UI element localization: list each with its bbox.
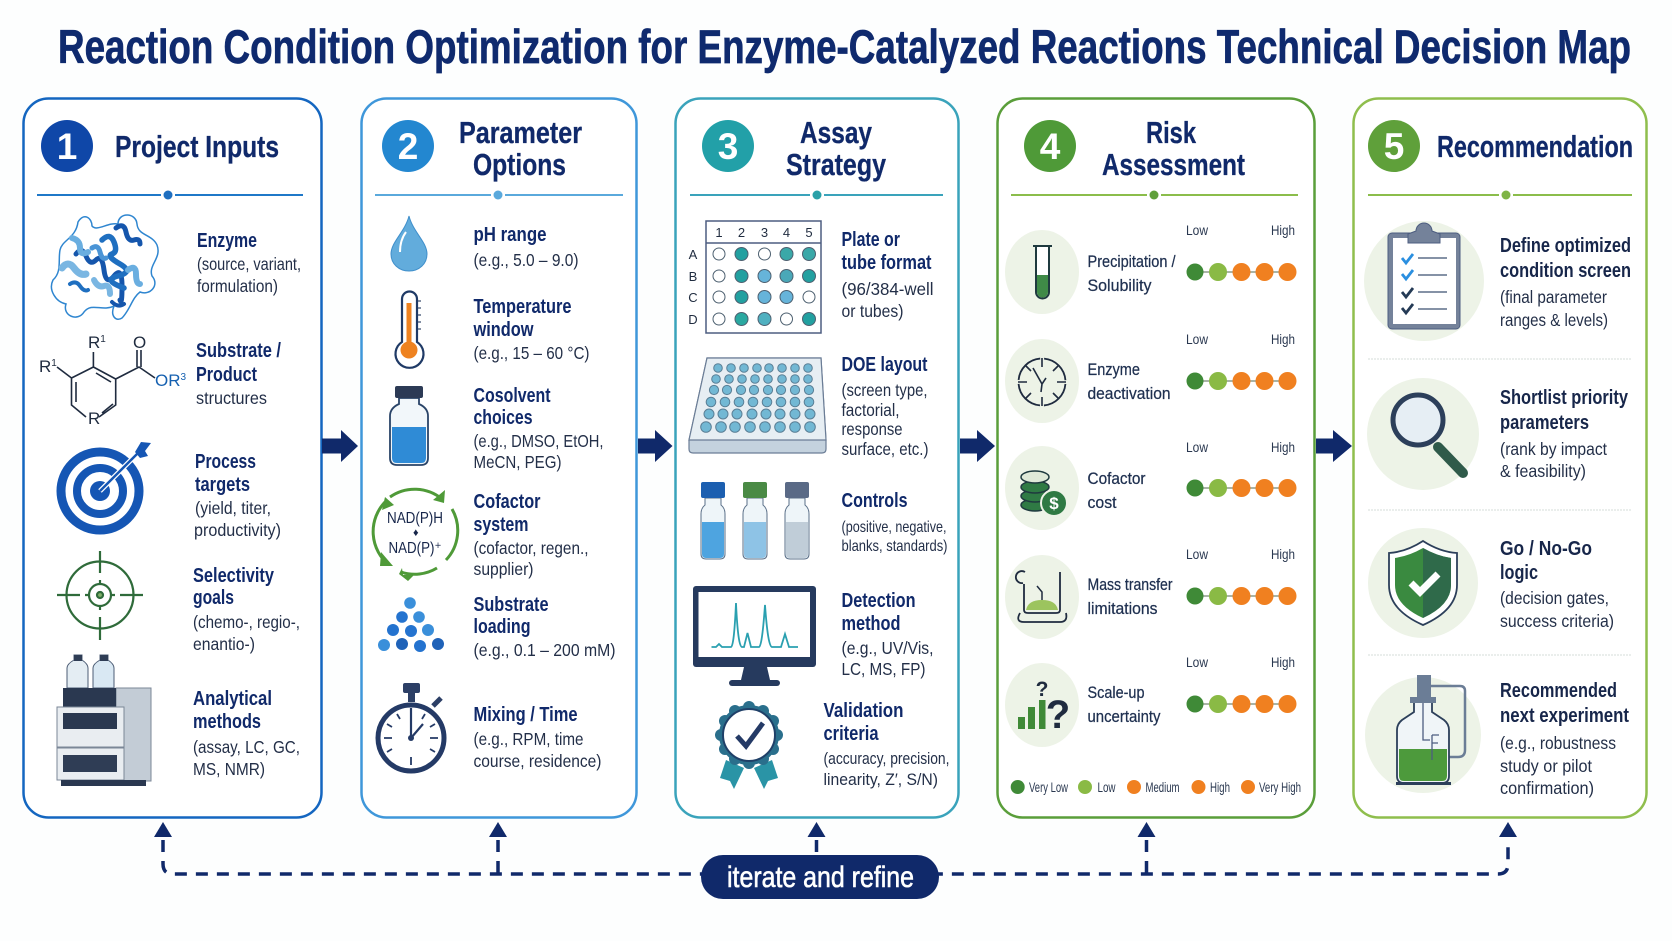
legend: risk scale: Very Low [1029,780,1068,795]
risk row: cofactor cost [1005,440,1296,530]
icon: cofactor cycle: ♦ [413,527,419,539]
icon: well plate grid: C [688,290,698,305]
text: cosolvent choices: Cosolvent [474,385,551,407]
text: process targets: Process [195,451,256,473]
text: cosolvent choices: choices [474,407,532,429]
icon: well plate grid: 4 [783,225,790,240]
text: validation criteria: linearity, Z′, S/N) [824,771,938,789]
risk row: precipitation / solubility [1005,223,1296,314]
arrow: risk to recommendation [1316,430,1352,462]
icon: chemical structure: R [88,333,100,352]
badge 5 [1368,120,1420,172]
text: mixing / time: Mixing / Time [474,704,578,726]
text: shortlist priority parameters: Shortlist priority [1500,387,1629,409]
text: define optimized condition screen [1500,235,1631,330]
badge 2 [382,120,434,172]
text: analytical methods: (assay, LC, GC, [193,737,300,757]
text: plate or tube format: or tubes) [842,301,904,321]
panel: recommendation [1354,98,1646,818]
text: plate or tube format [842,229,934,321]
text: analytical methods: Analytical [193,688,272,710]
icon: process target [61,442,151,530]
text: go / no-go logic [1500,538,1614,631]
text: go / no-go logic: logic [1500,562,1538,584]
text: pH range [474,224,578,270]
text: recommended next experiment: Recommended [1500,680,1617,702]
panel: assay strategy [676,98,958,818]
risk row: mass transfer limitations [1005,547,1296,639]
badge 4 [1024,120,1076,172]
text: cofactor system: supplier) [474,559,534,579]
risk row: enzyme deactivation: High [1271,332,1295,347]
text: substrate loading: Substrate [474,594,548,616]
icon: stopwatch [378,683,444,771]
text: recommended next experiment [1500,680,1629,798]
text: substrate loading: (e.g., 0.1 – 200 mM) [474,640,616,660]
text: process targets [194,451,281,540]
text: substrate / product: Product [196,364,257,386]
icon: validation badge [715,701,783,789]
icon: pH drop [391,216,427,271]
text: cofactor system: Cofactor [474,491,541,513]
text: detection method: Detection [842,590,916,612]
text: temperature window: (e.g., 15 – 60 °C) [474,343,590,363]
text: controls: blanks, standards) [842,538,948,555]
text: detection method: method [842,613,900,635]
panel: project inputs [24,98,322,818]
icon: well plate grid: B [689,269,697,284]
arrow: parameters to assay [638,430,672,462]
legend: risk scale [1011,780,1301,795]
icon: chemical structure: R [88,409,100,428]
heading: parameter options: Options [473,148,566,182]
icon: cofactor cycle: NAD(P)H [387,510,443,527]
text: substrate / product: Substrate / [196,340,281,362]
icon: well plate grid: A [689,247,698,262]
badge 2: 2 [398,126,418,167]
text: DOE layout: (screen type, [842,380,928,400]
text: controls [842,490,948,555]
iterate and refine pill [701,855,939,899]
icon: analytical instrument [57,655,151,786]
risk row: mass transfer limitations: Low [1186,547,1208,562]
icon: chemical structure: 1 [100,334,106,345]
legend: risk scale: Medium [1146,780,1180,795]
text: go / no-go logic: (decision gates, [1500,588,1609,608]
icon: well plate grid: 1 [715,225,723,240]
text: cosolvent choices [474,385,604,472]
heading: risk assessment [1102,116,1245,182]
text: temperature window: window [473,319,534,341]
text: detection method: (e.g., UV/Vis, [842,638,934,658]
icon: well plate grid: D [688,312,698,327]
text: DOE layout: surface, etc.) [842,439,928,459]
text: selectivity goals: goals [193,587,234,609]
text: cosolvent choices: (e.g., DMSO, EtOH, [474,431,604,451]
text: DOE layout: DOE layout [842,354,928,376]
icon: well plate grid: 3 [761,225,768,240]
heading: risk assessment: Risk [1146,116,1196,150]
panel: parameter options [362,98,636,818]
arrow: assay to risk [960,430,995,462]
icon: chemical structure: O [133,333,146,352]
text: define optimized condition screen: ranges & levels) [1500,310,1608,330]
text: selectivity goals: Selectivity [193,565,275,587]
legend: risk scale: Very High [1259,780,1301,795]
text: process targets: (yield, titer, [195,498,271,518]
feedback loop: dashed arrows [154,822,1517,874]
text: define optimized condition screen: Define optimized [1500,235,1631,257]
heading: parameter options: Parameter [459,116,582,150]
legend: risk scale: High [1210,780,1230,795]
legend: risk scale: Low [1098,780,1116,795]
badge 5: 5 [1384,126,1404,167]
risk row: enzyme deactivation: deactivation [1088,385,1170,403]
text: recommended next experiment: (e.g., robustness [1500,733,1616,753]
text: selectivity goals [193,565,300,654]
text: recommended next experiment: study or pilot [1500,756,1592,776]
text: DOE layout [842,354,928,459]
risk row: precipitation / solubility: Precipitation / [1088,253,1176,271]
heading: risk assessment: Assessment [1102,148,1245,182]
risk row: enzyme deactivation: Low [1186,332,1208,347]
heading: assay strategy: Strategy [786,148,886,182]
text: mixing / time [474,704,602,771]
risk row: scale-up uncertainty: Low [1186,655,1208,670]
text: DOE layout: factorial, [842,400,900,420]
risk row: enzyme deactivation [1005,332,1296,423]
text: substrate / product: structures [196,388,267,408]
icon: well plate grid: 2 [738,225,745,240]
badge 3 [702,120,754,172]
text: recommended next experiment: confirmation) [1500,778,1594,798]
iterate and refine pill: iterate and refine [727,861,914,894]
text: selectivity goals: (chemo-, regio-, [193,612,300,632]
risk row: cofactor cost: Cofactor [1088,470,1146,488]
text: cofactor system: (cofactor, regen., [474,538,588,558]
badge 1 [41,120,93,172]
badge 4: 4 [1040,126,1061,167]
text: mixing / time: (e.g., RPM, time [474,729,584,749]
text: analytical methods [193,688,300,779]
text: enzyme: Enzyme [197,230,257,252]
risk row: precipitation / solubility: High [1271,223,1295,238]
heading: assay strategy [786,116,886,182]
icon: substrate spheres [378,597,444,652]
text: validation criteria [824,700,950,789]
risk row: scale-up uncertainty: ? [1036,678,1048,701]
text: analytical methods: MS, NMR) [193,759,265,779]
text: plate or tube format: tube format [842,252,932,274]
icon: well plate grid: 5 [805,225,813,240]
icon: crosshair [57,551,143,640]
text: define optimized condition screen: condition screen [1500,260,1631,282]
text: analytical methods: methods [193,711,261,733]
risk row: scale-up uncertainty: uncertainty [1088,708,1161,726]
text: controls: (positive, negative, [842,519,946,536]
badge 3: 3 [718,126,738,167]
text: pH range: (e.g., 5.0 – 9.0) [474,250,578,270]
icon: control vials [701,482,809,559]
text: validation criteria: criteria [824,723,879,745]
panel: risk assessment [998,98,1314,818]
text: shortlist priority parameters: parameters [1500,412,1589,434]
icon: chemical structure [39,333,186,428]
text: shortlist priority parameters: & feasibility) [1500,461,1586,481]
heading: project inputs: Project Inputs [115,130,279,164]
icon: well plate grid [688,221,821,333]
text: validation criteria: Validation [824,700,904,722]
icon: thermometer [395,292,424,368]
risk row: scale-up uncertainty: High [1271,655,1295,670]
text: process targets: targets [195,474,250,496]
icon: chemical structure: 1 [51,358,57,369]
icon: enzyme [51,215,158,319]
icon: DOE plate [689,358,826,453]
risk row: mass transfer limitations: limitations [1088,600,1158,618]
text: mixing / time: course, residence) [474,751,602,771]
risk row: scale-up uncertainty: Scale-up [1088,684,1144,702]
icon: clipboard checklist [1364,221,1484,341]
risk row: scale-up uncertainty: ? [1046,693,1070,737]
text: shortlist priority parameters: (rank by impact [1500,439,1607,459]
risk row: cofactor cost: $ [1049,494,1059,513]
text: process targets: productivity) [194,520,281,540]
text: detection method [842,590,934,679]
text: go / no-go logic: success criteria) [1500,611,1614,631]
text: detection method: LC, MS, FP) [842,659,926,679]
text: define optimized condition screen: (final parameter [1500,287,1607,307]
text: cosolvent choices: MeCN, PEG) [474,452,562,472]
text: enzyme: formulation) [197,276,278,296]
icon: magnifier [1367,378,1479,490]
text: substrate loading: loading [474,616,530,638]
risk row: cofactor cost: High [1271,440,1295,455]
text: substrate loading [474,594,616,660]
icon: chemical structure: 3 [180,372,186,383]
text: validation criteria: (accuracy, precision, [824,750,950,768]
icon: experiment bottle [1365,675,1481,793]
text: enzyme [197,230,301,296]
risk row: mass transfer limitations: High [1271,547,1295,562]
text: DOE layout: response [842,419,902,439]
risk row: cofactor cost: Low [1186,440,1208,455]
icon: chemical structure: OR [155,371,180,390]
icon: cofactor cycle [373,489,458,581]
icon: monitor chromatogram [693,586,816,686]
risk row: mass transfer limitations: Mass transfer [1088,576,1173,594]
text: temperature window [473,296,590,363]
icon: chemical structure: R [39,357,51,376]
text: pH range: pH range [474,224,546,246]
text: cofactor system: system [474,514,528,536]
risk row: enzyme deactivation: Enzyme [1088,361,1140,379]
heading: parameter options [459,116,582,182]
risk row: scale-up uncertainty [1005,655,1296,747]
icon: shield check [1368,528,1478,638]
text: plate or tube format: (96/384-well [842,279,934,299]
badge 1: 1 [57,126,77,167]
risk row: precipitation / solubility: Low [1186,223,1208,238]
text: substrate / product [196,340,281,408]
text: go / no-go logic: Go / No-Go [1500,538,1592,560]
arrow: inputs to parameters [322,430,358,462]
text: temperature window: Temperature [474,296,572,318]
icon: cosolvent bottle [390,386,428,465]
text: recommended next experiment: next experiment [1500,705,1629,727]
text: enzyme: (source, variant, [197,254,301,274]
text: plate or tube format: Plate or [842,229,900,251]
text: controls: Controls [842,490,908,512]
text: cofactor system [474,491,588,579]
heading: assay strategy: Assay [800,116,872,150]
risk row: precipitation / solubility: Solubility [1088,277,1152,295]
icon: cofactor cycle: NAD(P)⁺ [388,540,442,557]
text: selectivity goals: enantio-) [193,634,255,654]
risk row: cofactor cost: cost [1088,494,1117,512]
text: shortlist priority parameters [1500,387,1629,481]
